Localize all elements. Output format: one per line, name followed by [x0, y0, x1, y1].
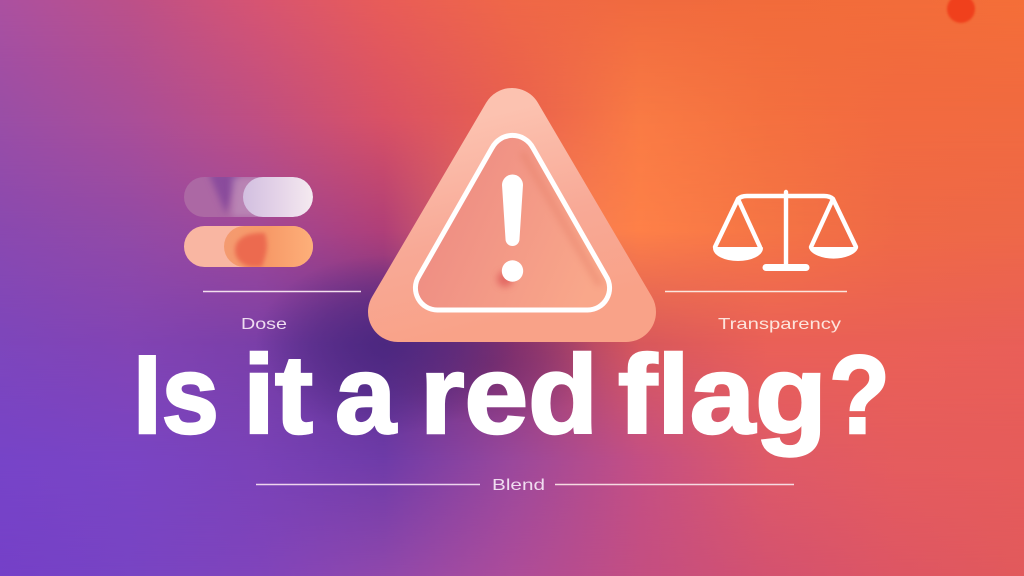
- divider: blend left: [256, 484, 480, 486]
- exclamation mark: [502, 174, 523, 282]
- title: red: [420, 333, 598, 457]
- title: flag: [618, 333, 827, 457]
- inner triangle outline: [415, 135, 610, 310]
- icon: warning triangle: [398, 118, 626, 312]
- lower toggle: [184, 226, 324, 267]
- icon: balance scale: [714, 192, 857, 268]
- inner triangle fill: [415, 135, 610, 310]
- upper toggle: [184, 177, 313, 217]
- divider: dose: [203, 290, 361, 292]
- icon: toggle sliders: [184, 177, 313, 267]
- label: Transparency: Transparency: [718, 316, 841, 333]
- title: Is: [133, 333, 219, 457]
- inner soft shadow: [522, 152, 600, 285]
- title: [133, 333, 890, 457]
- label: Blend: Blend: [492, 477, 545, 494]
- exclamation dot shadow: [497, 271, 513, 287]
- corner red dot: [947, 0, 975, 23]
- title: ?: [829, 333, 890, 457]
- divider: transparency: [665, 290, 847, 292]
- divider: blend right: [555, 484, 794, 486]
- title: a: [335, 333, 397, 457]
- title: it: [243, 333, 313, 457]
- label: Dose: Dose: [241, 316, 287, 333]
- outer triangle: [398, 118, 626, 312]
